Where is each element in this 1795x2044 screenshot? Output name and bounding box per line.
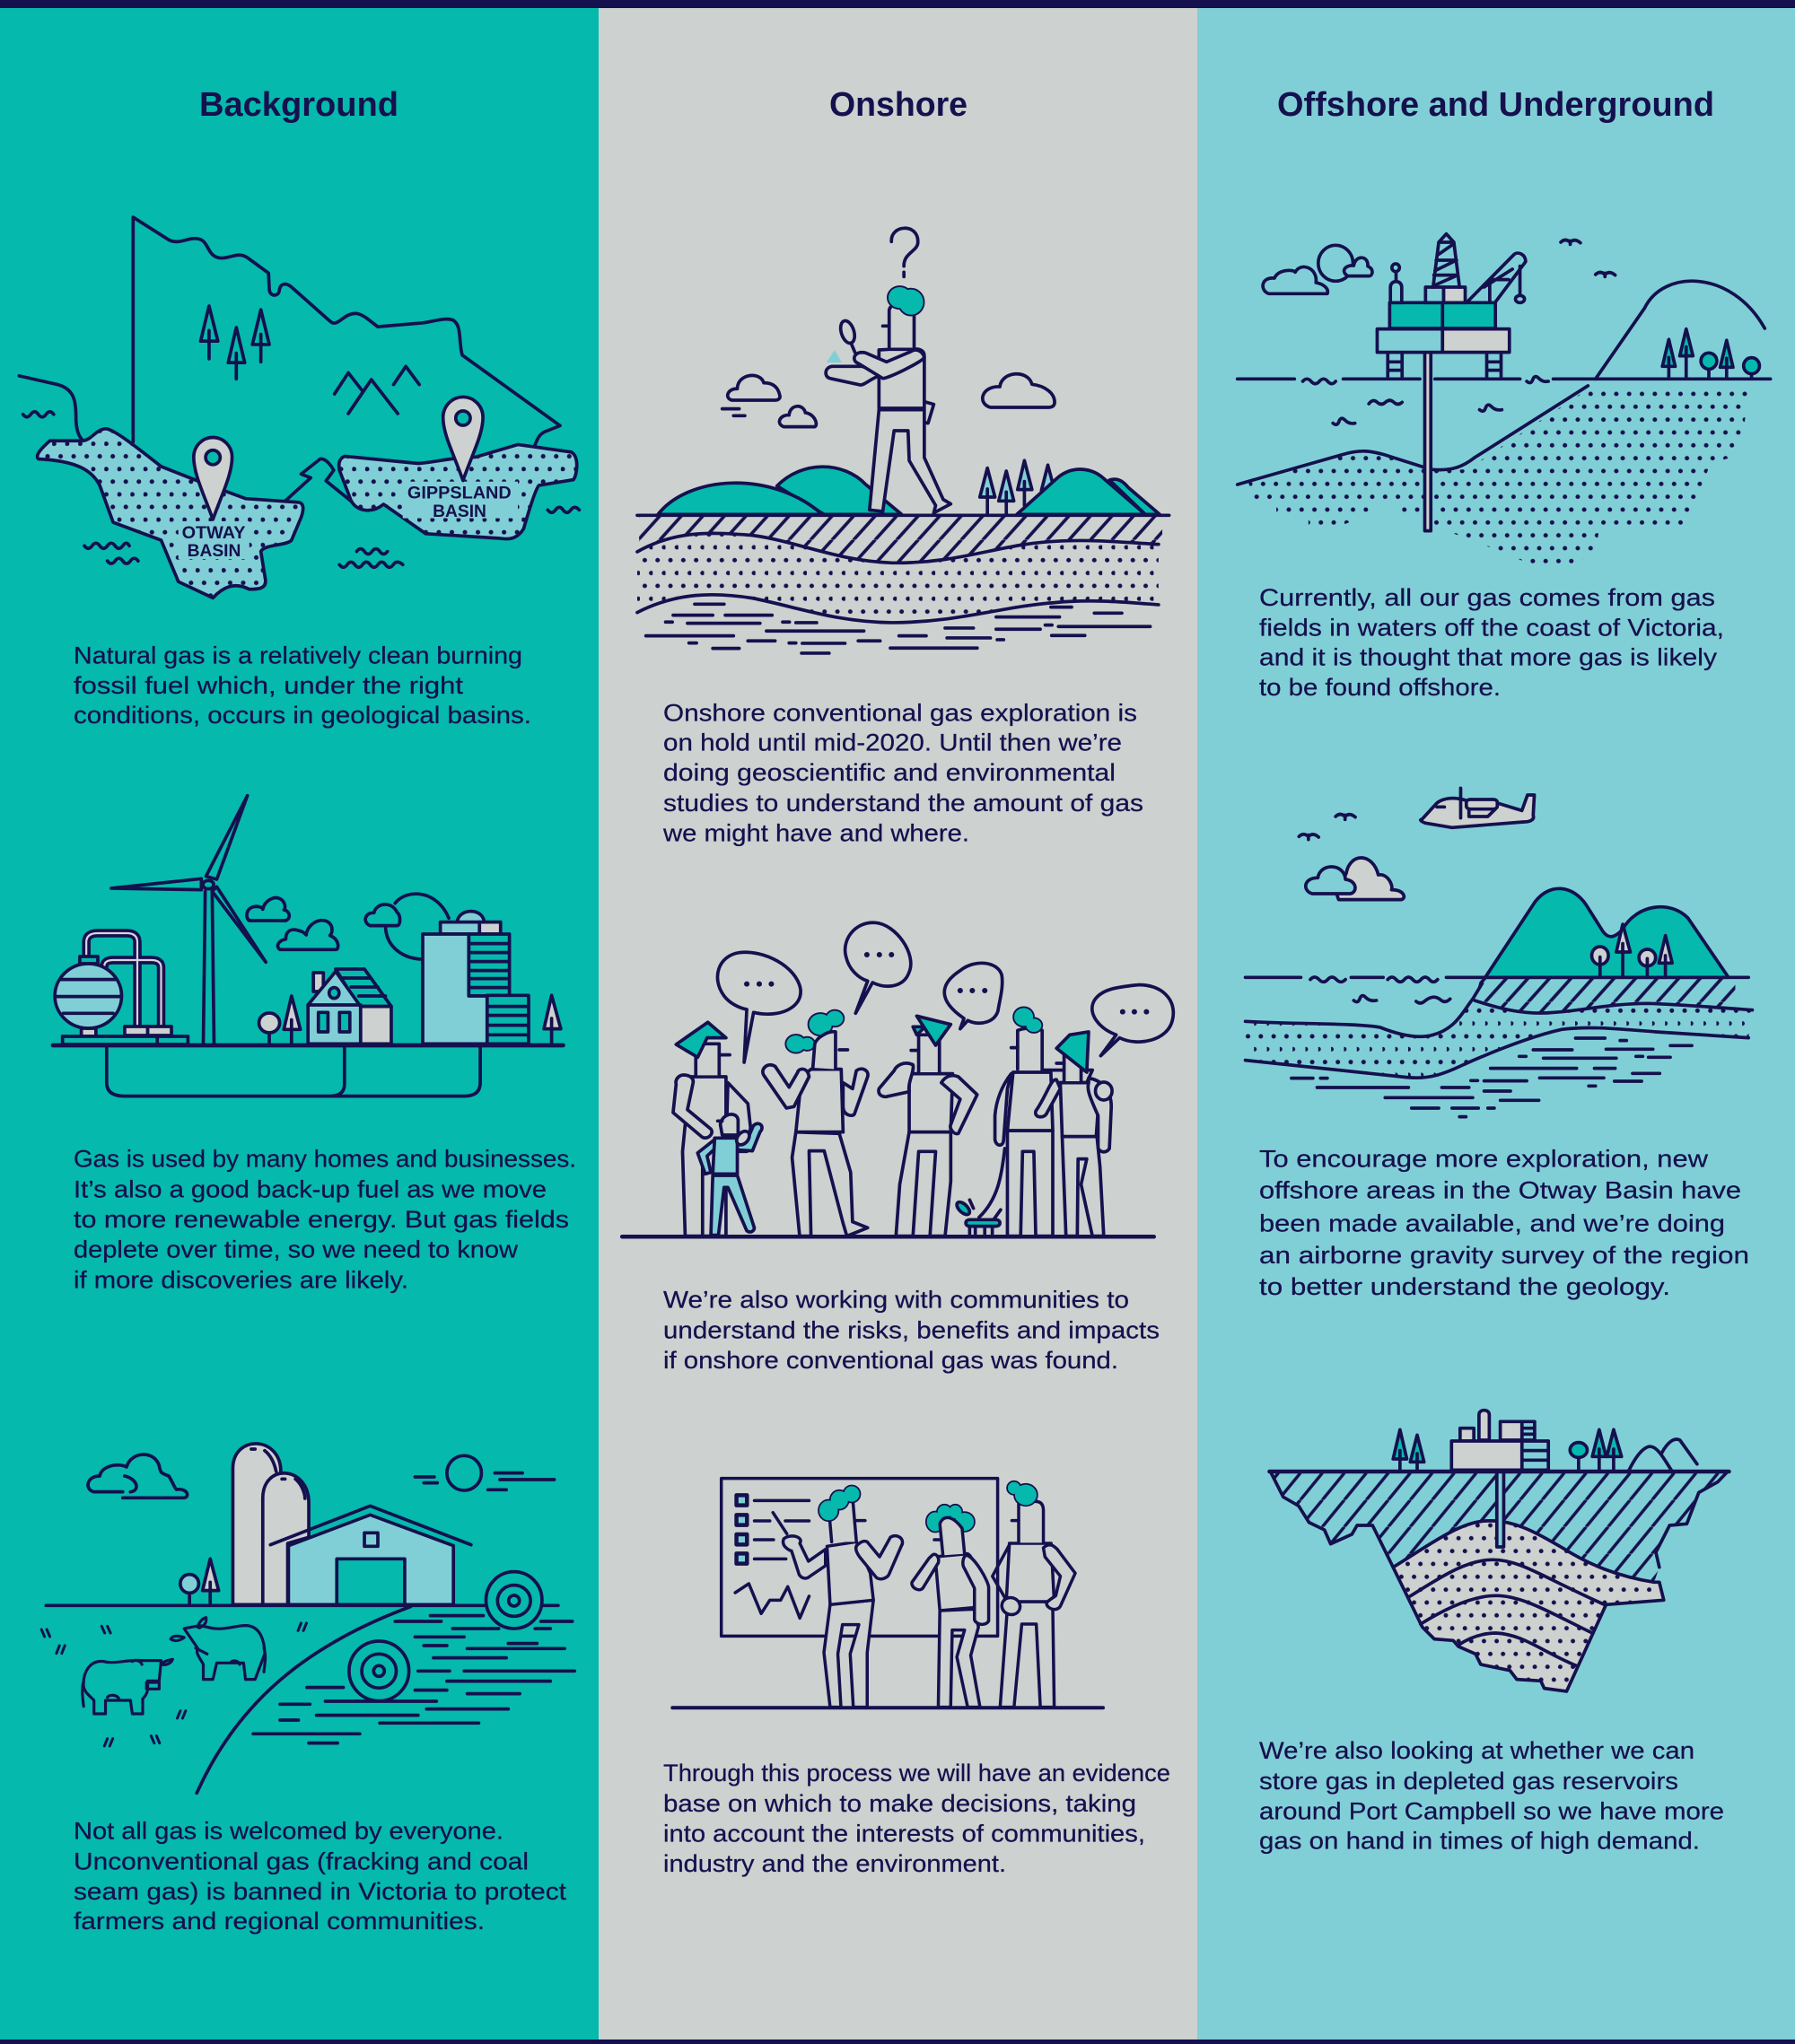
text: onshore exploration: studies to understand the amount of gas [663,790,1143,817]
dotted sandstone layer [637,533,1159,623]
ground and field edge [46,1605,558,1793]
hair [889,287,924,315]
text: gas use [74,1146,576,1293]
text: gas storage: around Port Campbell so we have more [1259,1797,1724,1824]
wind turbine [111,796,266,1044]
illustration: energy use with tank, turbine, house and buildings [53,796,563,1096]
underground pipeline [107,1046,480,1096]
platform [1377,234,1526,379]
sun and clouds [1263,245,1372,293]
question mark [891,228,918,276]
text: unconventional gas [74,1817,567,1935]
panel: background column [0,0,599,2044]
cloud [88,1454,188,1498]
text: offshore gas: fields in waters off the coast of Victoria, [1259,614,1724,641]
text: unconventional gas: farmers and regional communities. [74,1908,485,1935]
house [308,969,391,1044]
illustration: community group talking [622,922,1173,1236]
text: gas use: It’s also a good back-up fuel as we move [74,1175,547,1202]
text: gas storage: gas on hand in times of high demand. [1259,1828,1700,1855]
office building [423,912,529,1044]
waves [23,412,579,567]
panel: onshore column [599,0,1197,2044]
geologist [826,287,950,513]
sea surface and waves [1238,377,1771,424]
text: communities [663,1287,1160,1374]
hay bale near [349,1641,409,1701]
tank platform [63,1026,188,1044]
coastal hill [1596,281,1764,379]
western coast [19,376,83,440]
hills right [1017,469,1160,514]
trees [180,1559,219,1604]
clouds [247,898,338,949]
text: gas use: deplete over time, so we need to know [74,1236,519,1263]
sun and cloud [365,894,449,959]
hair [927,1506,974,1532]
silos [232,1444,309,1604]
illustration: three people at a presentation board [672,1479,1103,1708]
birds [1561,240,1616,276]
text: encourage exploration: an airborne gravity survey of the region [1259,1242,1749,1269]
sun streaks [415,1473,555,1489]
text: gas storage: We’re also looking at whether we can [1259,1737,1694,1764]
ground line [637,513,1169,517]
hatched coastal layer [1475,979,1735,1013]
Otway Basin: OTWAY [182,524,246,543]
text: evidence base: Through this process we will have an evidence [663,1760,1170,1786]
trees [1393,1429,1622,1471]
text: evidence base: base on which to make decisions, taking [663,1790,1136,1817]
text: gas use: if more discoveries are likely. [74,1266,408,1293]
Gippsland Basin: BASIN [433,502,486,521]
listener middle [912,1506,989,1708]
Gippsland Basin [339,444,577,539]
text: onshore exploration: we might have and where. [662,820,969,847]
illustration: underground gas storage [1269,1411,1729,1691]
text: gas storage: store gas in depleted gas reservoirs [1259,1768,1678,1795]
hatched soil layer [639,517,1162,563]
text: offshore gas [1259,584,1724,701]
text: communities: understand the risks, benefits and impacts [663,1316,1160,1343]
checklist [737,1495,809,1564]
hills left [658,467,902,514]
text: gas use: Gas is used by many homes and businesses. [74,1146,576,1173]
hay bale far [486,1572,542,1629]
heading: Background: Background [199,86,398,124]
mountains [1485,888,1729,977]
illustration: offshore gas platform [1238,234,1771,563]
gas pipes [86,933,162,1027]
text: encourage exploration: offshore areas in the Otway Basin have [1259,1177,1741,1204]
pin: Otway [194,437,232,520]
cow lower [83,1659,172,1714]
person 3 with hat [879,1016,977,1236]
text: unconventional gas: Unconventional gas (fracking and coal [74,1847,529,1874]
text: evidence base: industry and the environment. [663,1850,1006,1877]
text: onshore exploration: on hold until mid-2020. Until then we’re [663,729,1122,756]
text: encourage exploration [1259,1146,1749,1300]
text: offshore gas: Currently, all our gas comes from gas [1259,584,1715,611]
hair [786,1011,843,1053]
crane [1467,253,1526,302]
shale dashes [1292,1038,1692,1117]
ploughed field rows [253,1616,574,1743]
heading: Onshore: Onshore [829,86,968,124]
pin: Gippsland [443,397,483,480]
ground line [1269,1470,1729,1473]
illustration: map of Victoria with gas basins [19,217,579,598]
ground line [622,1235,1154,1239]
Otway Basin: BASIN [188,542,241,561]
dotted layer [1246,999,1752,1078]
drill pipe [1424,353,1431,531]
trees [980,460,1055,514]
speech bubble 2 [845,922,911,1013]
trees [1592,924,1672,977]
person 2 with curly hair [763,1011,868,1236]
derrick [1433,234,1459,287]
presenter [773,1486,903,1708]
seabed [1238,386,1588,485]
flare stack [1390,282,1402,302]
text: onshore exploration: doing geoscientific and environmental [663,759,1116,786]
text: gas use: to more renewable energy. But gas fields [74,1206,569,1233]
text: unconventional gas: seam gas) is banned in Victoria to protect [74,1878,567,1905]
text: communities: We’re also working with communities to [663,1287,1129,1314]
text: onshore exploration: Onshore conventional gas exploration is [663,699,1137,726]
Victoria outline [133,217,560,444]
text: offshore gas: and it is thought that more gas is likely [1259,644,1718,671]
sea surface and waves [1246,977,1748,1003]
survey plane [1421,788,1535,827]
text: natural gas [74,642,531,729]
line chart [735,1584,809,1618]
layer boundaries [637,533,1159,623]
storage tank [55,956,121,1036]
injection well [1497,1472,1503,1547]
ground line [53,1044,563,1047]
dotted gas-bearing rock [1248,389,1748,563]
panel: offshore and underground column [1197,0,1795,2044]
clouds [722,374,1055,427]
layer boundaries [1246,983,1752,1078]
dog on leash [954,1149,1005,1234]
illustration: geologist with question mark over rock layers [637,228,1169,653]
birds [1299,814,1355,840]
Gippsland Basin: GIPPSLAND [407,485,512,503]
text: offshore gas: to be found offshore. [1259,674,1501,701]
central coast [285,459,355,504]
trees [201,306,269,379]
illustration: farm with silos, barn, cows and hay bales [41,1444,574,1793]
sun [447,1455,481,1490]
child [697,1114,762,1236]
speech bubble 4 [1092,985,1173,1056]
text: encourage exploration: to better understand the geology. [1259,1273,1670,1300]
text: encourage exploration: To encourage more exploration, new [1259,1146,1709,1173]
text: encourage exploration: been made available, and we’re doing [1259,1210,1725,1237]
text: unconventional gas: Not all gas is welcomed by everyone. [74,1817,503,1844]
cow upper [171,1618,266,1680]
person 1 with hat [673,1022,750,1236]
presentation board [722,1479,998,1636]
trees [258,995,561,1044]
person 4 with curly hair [995,1008,1092,1236]
shale dashes [646,604,1151,653]
hair [1008,1482,1037,1505]
Otway Basin [38,429,303,598]
hair [1014,1008,1041,1032]
gas reservoir rock [1393,1521,1664,1691]
listener right [993,1482,1075,1708]
person 5 with hat [1036,1032,1112,1236]
text: natural gas: fossil fuel which, under the right [74,672,464,699]
text: natural gas: conditions, occurs in geological basins. [74,702,531,729]
floor line [672,1706,1103,1709]
speech bubble 1 [717,952,801,1062]
speech bubble 3 [944,963,1003,1029]
surface facility [1451,1411,1548,1470]
text: communities: if onshore conventional gas was found. [663,1347,1118,1374]
text: natural gas: Natural gas is a relatively clean burning [74,642,522,669]
grass tufts [41,1623,306,1746]
bottom bar [0,2040,1795,2044]
hair [819,1486,860,1520]
clouds [1306,858,1404,900]
mountains [335,366,419,414]
illustration: airborne gravity survey [1246,788,1752,1117]
trees [1662,329,1759,379]
top bar [0,0,1795,8]
text: evidence base [663,1760,1170,1877]
hatched cap rock [1271,1473,1726,1582]
text: onshore exploration [662,699,1143,847]
text: gas storage [1259,1737,1724,1855]
mountains [1629,1439,1697,1470]
text: evidence base: into account the interests of communities, [663,1820,1145,1847]
barn [270,1506,471,1604]
heading: Offshore and Underground: Offshore and Underground [1277,86,1714,124]
